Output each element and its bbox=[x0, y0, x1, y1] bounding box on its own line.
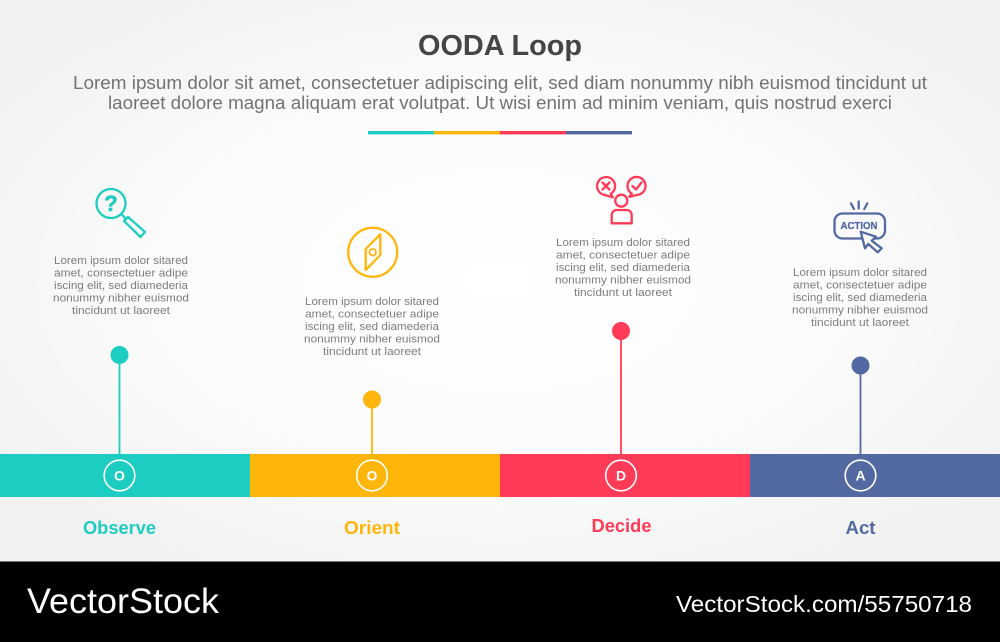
title: OODA Loop bbox=[418, 30, 582, 62]
subtitle text: Lorem ipsum dolor sit amet, consectetuer adipiscing elit, sed diam nonummy nibh euismod tincidunt ut bbox=[73, 72, 927, 93]
text block: act: iscing elit, sed diamederia bbox=[793, 292, 927, 304]
text block: decide: Lorem ipsum dolor sitared bbox=[556, 237, 690, 249]
subtitle text: laoreet dolore magna aliquam erat volutpat. Ut wisi enim ad minim veniam, quis nostrud exerci bbox=[108, 92, 892, 113]
bar segment: act bbox=[750, 454, 1000, 497]
text block: decide: tincidunt ut laoreet bbox=[574, 287, 672, 299]
bar segment: decide bbox=[500, 454, 750, 497]
text block: orient: iscing elit, sed diamederia bbox=[305, 321, 439, 333]
footer url: VectorStock.com/55750718 bbox=[676, 591, 972, 617]
text block: decide: iscing elit, sed diamederia bbox=[556, 262, 690, 274]
text block: orient: amet, consectetuer adipe bbox=[305, 308, 439, 320]
bar segment: orient bbox=[250, 454, 500, 497]
footer band bbox=[0, 562, 1000, 642]
text block: observe: iscing elit, sed diamederia bbox=[54, 280, 188, 292]
bar segment: observe: O bbox=[114, 468, 125, 484]
icon: magnifier with question mark bbox=[96, 189, 145, 237]
text block: act bbox=[792, 267, 928, 329]
text block: act: amet, consectetuer adipe bbox=[793, 280, 927, 292]
text block: decide bbox=[555, 237, 691, 299]
label: observe: Observe bbox=[83, 517, 156, 538]
icon: compass bbox=[348, 228, 397, 277]
text block: observe: nonummy nibher euismod bbox=[53, 292, 189, 304]
pin: observe bbox=[110, 346, 128, 455]
text block: orient bbox=[304, 296, 440, 358]
accent colour rule bbox=[368, 131, 632, 134]
text block: orient: Lorem ipsum dolor sitared bbox=[305, 296, 439, 308]
subtitle text bbox=[73, 72, 927, 113]
text block: act: nonummy nibher euismod bbox=[792, 304, 928, 316]
label: decide: Decide bbox=[592, 515, 652, 536]
text block: decide: amet, consectetuer adipe bbox=[556, 250, 690, 262]
pin: act bbox=[852, 356, 870, 455]
icon: action button with cursor bbox=[834, 202, 885, 252]
bar segment: act: A bbox=[855, 468, 866, 484]
footer logo: VectorStock bbox=[27, 582, 220, 621]
text block: orient: tincidunt ut laoreet bbox=[323, 346, 421, 358]
text block: decide: nonummy nibher euismod bbox=[555, 274, 691, 286]
bar segment: decide: D bbox=[616, 468, 626, 484]
icon: action button with cursor: ACTION bbox=[840, 221, 878, 232]
label: act: Act bbox=[846, 517, 876, 538]
text block: observe bbox=[53, 255, 189, 317]
text block: act: tincidunt ut laoreet bbox=[811, 317, 909, 329]
label: orient: Orient bbox=[344, 517, 400, 538]
text block: act: Lorem ipsum dolor sitared bbox=[793, 267, 927, 279]
text block: observe: Lorem ipsum dolor sitared bbox=[54, 255, 188, 267]
text block: orient: nonummy nibher euismod bbox=[304, 334, 440, 346]
icon: person deciding bbox=[597, 177, 646, 223]
icon: magnifier with question mark: ? bbox=[104, 191, 118, 216]
pin: orient bbox=[363, 390, 381, 455]
pin: decide bbox=[612, 322, 630, 455]
text block: observe: tincidunt ut laoreet bbox=[72, 305, 170, 317]
bar segment: orient: O bbox=[367, 468, 378, 484]
bar segment: observe bbox=[0, 454, 250, 497]
text block: observe: amet, consectetuer adipe bbox=[54, 268, 188, 280]
